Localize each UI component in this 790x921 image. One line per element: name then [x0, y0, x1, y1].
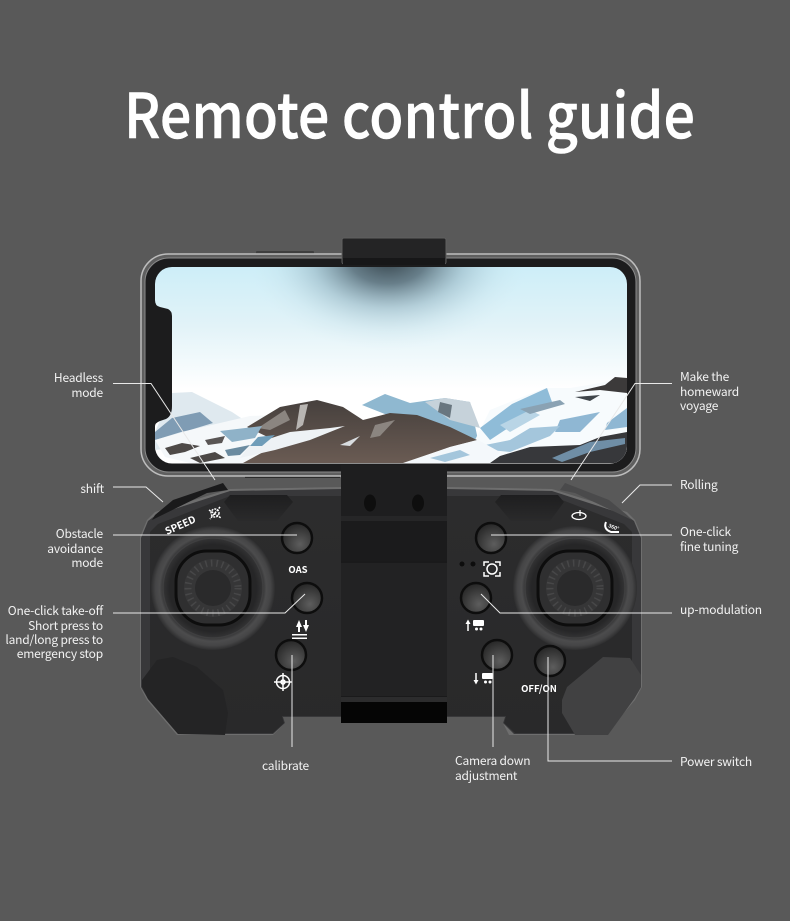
phone top clamp [342, 238, 446, 265]
indicator dots [460, 562, 476, 566]
OAS label: OAS [288, 562, 308, 576]
label: obstacle avoidance mode: Obstacle [56, 525, 104, 542]
right grip body [447, 487, 642, 735]
label: camera down adjustment: Camera down [455, 752, 530, 769]
controller [140, 465, 642, 735]
icon: rolling 360: 360° [607, 522, 620, 533]
OFF/ON label: OFF/ON [521, 681, 557, 695]
icon: camera down [474, 673, 493, 684]
label: headless mode: mode [71, 384, 104, 401]
icon: fine tuning target [484, 562, 500, 576]
label: one-click take-off: Short press to [28, 617, 103, 634]
icon: headless mode [209, 507, 221, 519]
icon: homeward [572, 510, 586, 520]
label: up-modulation: up-modulation [680, 601, 762, 618]
right joystick [513, 526, 637, 650]
label: one-click take-off: emergency stop [17, 645, 103, 662]
label: obstacle avoidance mode: mode [71, 554, 104, 571]
phone [141, 238, 640, 478]
left shoulder button: shift [152, 483, 228, 520]
label: obstacle avoidance mode: avoidance [47, 540, 104, 557]
title: Remote control guide [124, 66, 695, 156]
label: make the homeward voyage: voyage [680, 397, 719, 414]
label: shift: shift [80, 480, 105, 497]
phone notch [155, 300, 172, 426]
label: power switch: Power switch [680, 753, 752, 770]
left joystick [151, 526, 275, 650]
label: one-click fine tuning: One-click [680, 523, 732, 540]
label: one-click take-off: land/long press to [5, 631, 103, 648]
phone screen: mountain photo [155, 267, 627, 464]
label: one-click take-off: One-click take-off [8, 602, 104, 619]
label: one-click fine tuning: fine tuning [680, 538, 739, 555]
right grip pad [562, 657, 641, 735]
icon: calibrate crosshair [274, 673, 292, 691]
left grip pad [142, 657, 228, 735]
center bridge [341, 465, 447, 723]
speed label: SPEED [162, 511, 198, 538]
label: calibrate: calibrate [262, 757, 310, 774]
icon: camera up [466, 620, 484, 631]
right buttons [461, 523, 565, 676]
label: camera down adjustment: adjustment [455, 767, 518, 784]
label: make the homeward voyage: Make the [680, 368, 730, 385]
label: rolling: Rolling [680, 476, 718, 493]
right shoulder button: rolling [560, 483, 632, 520]
icon: take-off arrows [292, 620, 309, 639]
left grip body [140, 487, 341, 735]
left buttons [276, 523, 322, 670]
leader lines [113, 384, 672, 761]
label: headless mode: Headless [54, 369, 104, 386]
label: make the homeward voyage: homeward [680, 383, 739, 400]
